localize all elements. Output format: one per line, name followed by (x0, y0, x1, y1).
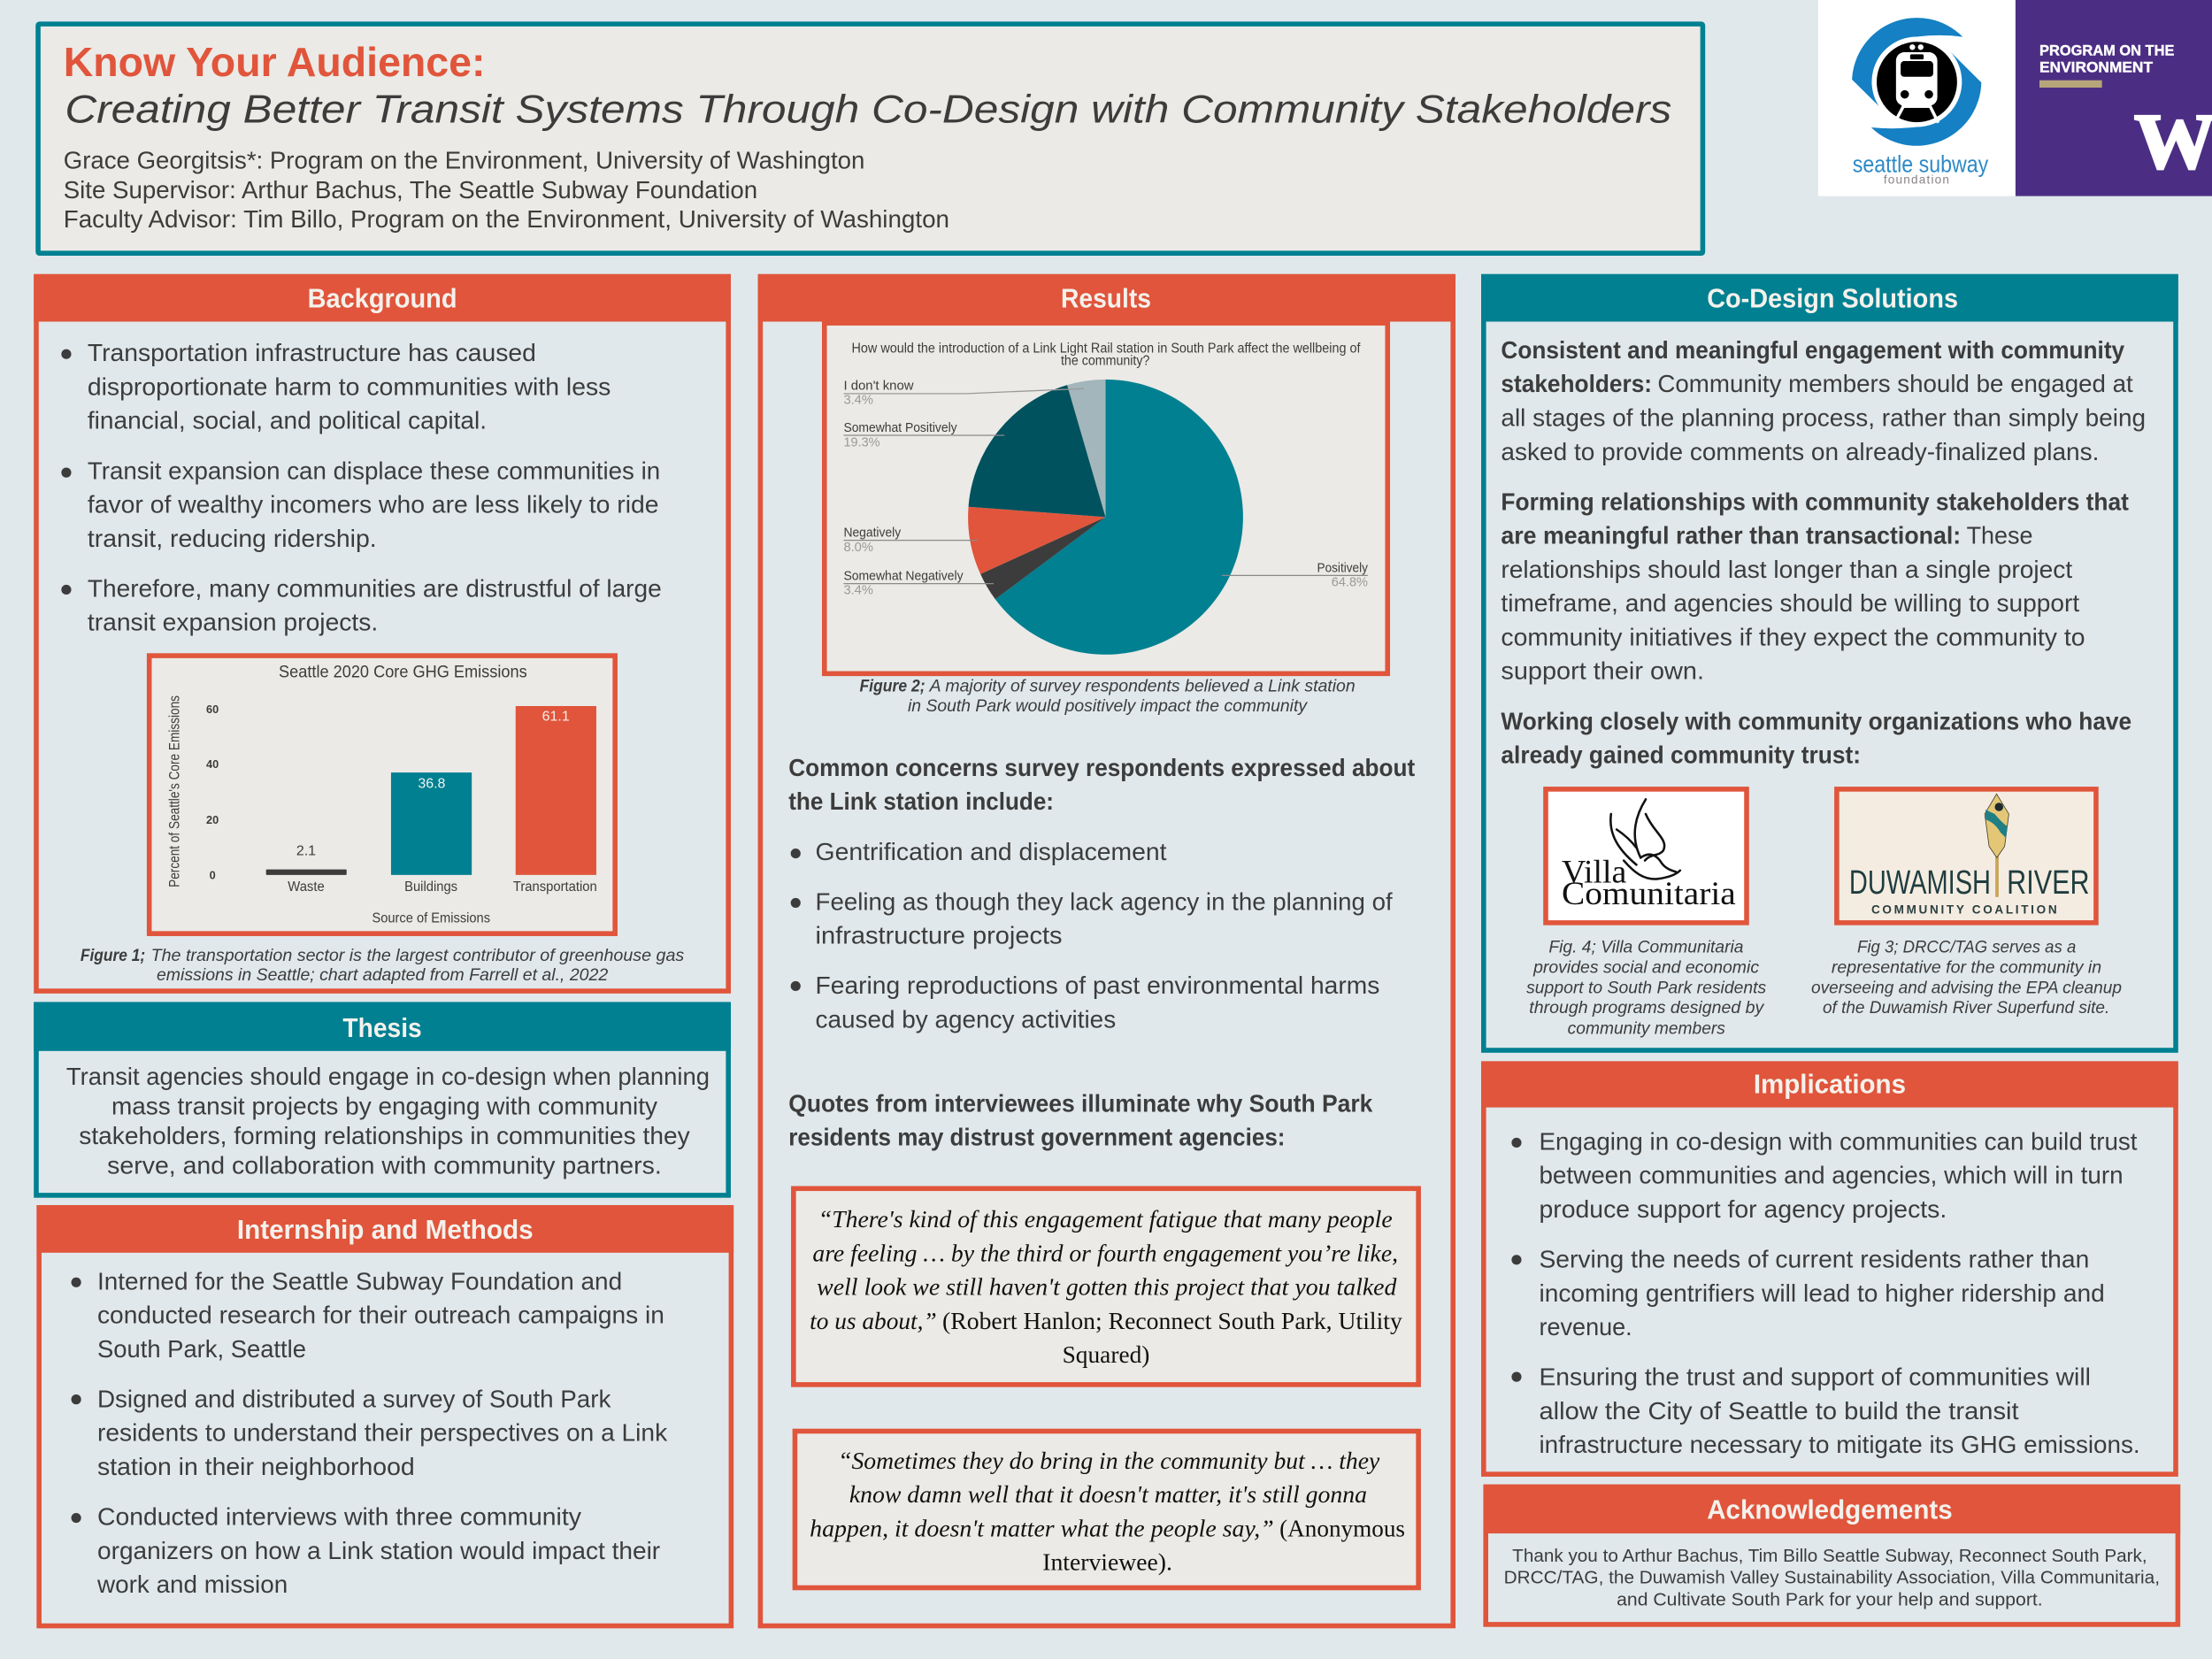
caption: figure 3: overseeing and advising the EPA cleanup (1811, 979, 2122, 997)
panel: Thesis (34, 1002, 731, 1195)
chart: Seattle 2020 core GHG emissions: 36.8 (418, 777, 446, 792)
chart: South Park survey pie: 3.4% (843, 393, 873, 408)
chart: South Park survey pie: Negatively (843, 526, 902, 541)
text: forming relationships: These (1967, 522, 2033, 549)
text: common concerns: infrastructure projects (816, 922, 1063, 949)
text: background bullets: transit expansion projects. (88, 609, 378, 636)
chart: South Park survey pie: 64.8% (1332, 575, 1368, 590)
text: implications bullets: produce support for agency projects. (1539, 1195, 1947, 1223)
text: methods bullets: residents to understand their perspectives on a Link (97, 1419, 667, 1447)
text: common concerns: Gentrification and displacement (816, 838, 1167, 865)
logo: UW Program on the Environment: W (2134, 97, 2212, 185)
chart: Seattle 2020 core GHG emissions: 60 (206, 703, 219, 716)
caption: figure 2: in South Park would positively impact the community (908, 697, 1308, 716)
callout: quote 1: are feeling … by the third or fourth engagement you’re like, (812, 1240, 1398, 1267)
text: community organizations: Working closely with community organizations who have (1501, 707, 2131, 734)
text: methods bullets: organizers on how a Link station would impact their (97, 1537, 660, 1564)
text: implications bullets: incoming gentrifiers will lead to higher ridership and (1539, 1279, 2105, 1307)
chart: South Park survey pie (825, 323, 1387, 673)
text: thanks (1504, 1547, 2160, 1609)
callout: quote 1: to us about,” (810, 1308, 937, 1335)
heading: Results: Results (1061, 285, 1151, 314)
text: quotes intro (788, 1089, 1373, 1151)
text: thesis statement: mass transit projects by engaging with community (111, 1093, 657, 1120)
chart: Seattle 2020 core GHG emissions: Percent of Seattle's Core Emissions (165, 695, 182, 887)
text: consistent engagement (1501, 336, 2146, 465)
subtitle: Creating Better Transit Systems Through Co-Design with Community Stakeholders (65, 88, 1671, 132)
logo: Seattle Subway Foundation: seattle subway (1853, 150, 1989, 177)
text: methods bullets: Interned for the Seattle Subway Foundation and (97, 1267, 622, 1294)
text: consistent engagement: Community members should be engaged at (1657, 370, 2133, 397)
chart: South Park survey pie: 3.4% (843, 583, 873, 598)
authors (64, 147, 949, 233)
heading: Thesis: Thesis (342, 1014, 422, 1043)
text: implications bullets: allow the City of Seattle to build the transit (1539, 1397, 2019, 1425)
callout: quote 2 (795, 1432, 1418, 1587)
chart: South Park survey pie: Somewhat Negatively (843, 569, 964, 584)
chart: South Park survey pie: the community? (1061, 354, 1150, 369)
heading: Background: Background (308, 285, 457, 314)
text: thanks: DRCC/TAG, the Duwamish Valley Sustainability Association, Villa Communitaria, (1504, 1569, 2160, 1588)
text: background bullets: Transportation infrastructure has caused (88, 339, 536, 366)
panel: title block (38, 24, 1702, 253)
text: common concerns: caused by agency activities (816, 1006, 1116, 1033)
text: forming relationships: community initiatives if they expect the community to (1501, 623, 2085, 650)
chart: Seattle 2020 core GHG emissions: Source of Emissions (372, 911, 490, 926)
text: consistent engagement: all stages of the planning process, rather than simply being (1501, 404, 2146, 432)
heading: Implications: Implications (1754, 1071, 1906, 1100)
chart: Seattle 2020 core GHG emissions: Buildings (404, 879, 457, 895)
chart: South Park survey pie: Positively (1317, 561, 1368, 576)
text: forming relationships: relationships should last longer than a single project (1501, 556, 2072, 583)
text: methods bullets: Conducted interviews with three community (97, 1503, 581, 1531)
chart: South Park survey pie: 19.3% (843, 434, 880, 449)
panel: Co-Design Solutions (1481, 274, 2178, 1050)
text: forming relationships: are meaningful rather than transactional: (1501, 522, 1961, 549)
logo: Villa Comunitaria: Comunitaria (1562, 875, 1736, 911)
callout: quote 1: well look we still haven't gotten this project that you talked (817, 1274, 1397, 1302)
caption: figure 4: support to South Park residents (1526, 979, 1767, 997)
caption: figure 2: A majority of survey respondents believed a Link station (929, 677, 1356, 695)
caption: figure 4: Fig. 4; Villa Communitaria (1548, 939, 1744, 957)
caption: figure 4: through programs designed by (1529, 999, 1765, 1018)
chart: Seattle 2020 core GHG emissions: 2.1 (296, 844, 316, 859)
text: methods bullets: work and mission (96, 1571, 288, 1598)
text: quotes intro: residents may distrust government agencies: (788, 1124, 1285, 1151)
text: implications bullets (1511, 1127, 2140, 1458)
heading: Acknowledgements: Acknowledgements (1707, 1495, 1953, 1525)
text: implications bullets: revenue. (1539, 1313, 1632, 1340)
text: thesis statement: stakeholders, forming relationships in communities they (79, 1122, 690, 1149)
text: implications bullets: Engaging in co-design with communities can build trust (1539, 1127, 2138, 1155)
authors: Grace Georgitsis*: Program on the Environment, University of Washington (64, 147, 864, 174)
title: Know Your Audience: (64, 39, 485, 85)
text: thesis statement: Transit agencies should engage in co-design when planning (66, 1063, 710, 1090)
panel: Internship and Methods (36, 1205, 733, 1626)
text: background bullets: favor of wealthy incomers who are less likely to ride (88, 491, 659, 518)
chart: Seattle 2020 core GHG emissions: Transportation (513, 879, 597, 895)
text: common concerns: Common concerns survey respondents expressed about (788, 754, 1415, 781)
text: implications bullets: infrastructure necessary to mitigate its GHG emissions. (1539, 1431, 2140, 1458)
panel: Acknowledgements (1483, 1485, 2180, 1624)
caption: figure 3: representative for the community in (1832, 958, 2101, 977)
caption: figure 4: community members (1568, 1019, 1725, 1038)
logo: Villa Comunitaria: Villa (1562, 853, 1626, 889)
panel: Implications (1481, 1061, 2178, 1474)
caption: figure 3 (1811, 939, 2122, 1018)
chart: Seattle 2020 core GHG emissions: Seattle 2020 Core GHG Emissions (279, 663, 527, 681)
text: thesis statement (66, 1063, 710, 1179)
text: forming relationships: Forming relationships with community stakeholders that (1501, 488, 2129, 515)
text: background bullets (61, 339, 662, 636)
callout: quote 1 (794, 1188, 1418, 1385)
text: consistent engagement: Consistent and meaningful engagement with community (1501, 336, 2125, 364)
callout: quote 2: Interviewee). (1042, 1549, 1172, 1577)
text: thanks: and Cultivate South Park for your help and support. (1617, 1590, 2043, 1609)
text: background bullets: Transit expansion can displace these communities in (88, 457, 660, 484)
heading: Co-Design Solutions: Co-Design Solutions (1707, 285, 1958, 314)
text: thesis statement: serve, and collaboration with community partners. (107, 1152, 662, 1179)
text: common concerns: the Link station include: (788, 787, 1054, 815)
logo: Duwamish River Community Coalition: RIVER (2007, 864, 2090, 902)
text: methods bullets: conducted research for their outreach campaigns in (97, 1302, 664, 1329)
callout: quote 2: (Anonymous (1279, 1515, 1405, 1542)
callout: quote 2: know damn well that it doesn't matter, it's still gonna (849, 1481, 1367, 1509)
text: background bullets: financial, social, and political capital. (88, 407, 487, 434)
text: quotes intro: Quotes from interviewees illuminate why South Park (788, 1089, 1373, 1117)
text: consistent engagement: stakeholders: (1501, 370, 1652, 397)
text: forming relationships (1501, 488, 2129, 685)
logo: Duwamish River Community Coalition: COMMUNITY COALITION (1871, 903, 2057, 917)
logo: UW Program on the Environment: PROGRAM ON THE (2039, 42, 2174, 59)
logo: UW Program on the Environment: ENVIRONMENT (2039, 58, 2154, 75)
caption: figure 1: Figure 1; (81, 947, 145, 965)
caption: figure 3: of the Duwamish River Superfund site. (1823, 999, 2109, 1018)
logo: Seattle Subway Foundation: foundation (1884, 173, 1949, 186)
chart: Seattle 2020 core GHG emissions (150, 656, 615, 933)
chart: South Park survey pie: How would the introduction of a Link Light Rail station in South Park affect the wellbeing of (852, 341, 1361, 356)
logo: Villa Comunitaria (1546, 789, 1747, 923)
chart: Seattle 2020 core GHG emissions: 61.1 (542, 710, 570, 725)
text: background bullets: transit, reducing ridership. (88, 525, 377, 552)
panel: Background (34, 274, 731, 991)
caption: figure 2 (859, 677, 1356, 716)
text: methods bullets: South Park, Seattle (97, 1335, 306, 1363)
logo: Seattle Subway Foundation (1818, 0, 2016, 196)
caption: figure 2: Figure 2; (859, 677, 926, 695)
callout: quote 2: happen, it doesn't matter what the people say,” (810, 1515, 1274, 1542)
callout: quote 1: Squared) (1063, 1341, 1149, 1369)
text: background bullets: disproportionate harm to communities with less (88, 373, 611, 400)
text: implications bullets: Ensuring the trust and support of communities will (1539, 1363, 2091, 1391)
logo: Duwamish River Community Coalition: DUWAMISH (1849, 864, 1991, 902)
panel: Results (758, 274, 1455, 1626)
callout: quote 1: “There's kind of this engagement fatigue that many people (818, 1206, 1393, 1233)
chart: South Park survey pie: I don't know (843, 379, 914, 394)
logo: Duwamish River Community Coalition (1837, 789, 2096, 923)
caption: figure 1: emissions in Seattle; chart adapted from Farrell et al., 2022 (157, 966, 609, 985)
chart: Seattle 2020 core GHG emissions: 0 (210, 868, 216, 881)
callout: quote 1: (Robert Hanlon; Reconnect South Park, Utility (942, 1308, 1402, 1335)
caption: figure 4 (1526, 939, 1767, 1038)
chart: Seattle 2020 core GHG emissions: Waste (288, 879, 325, 895)
text: thanks: Thank you to Arthur Bachus, Tim Billo Seattle Subway, Reconnect South Park, (1512, 1547, 2147, 1566)
text: implications bullets: between communities and agencies, which will in turn (1539, 1162, 2124, 1189)
text: methods bullets: station in their neighborhood (97, 1453, 415, 1480)
text: methods bullets (72, 1267, 667, 1598)
chart: Seattle 2020 core GHG emissions: 20 (206, 813, 219, 826)
chart: Seattle 2020 core GHG emissions: 40 (206, 757, 219, 771)
authors: Site Supervisor: Arthur Bachus, The Seattle Subway Foundation (64, 176, 757, 204)
caption: figure 1: The transportation sector is the largest contributor of greenhouse gas (151, 947, 685, 965)
caption: figure 4: provides social and economic (1532, 958, 1759, 977)
text: implications bullets: Serving the needs of current residents rather than (1539, 1246, 2089, 1273)
chart: South Park survey pie: Somewhat Positively (843, 420, 957, 435)
text: common concerns: Fearing reproductions of past environmental harms (816, 972, 1379, 999)
caption: figure 1 (81, 947, 685, 985)
text: forming relationships: timeframe, and agencies should be willing to support (1501, 589, 2079, 617)
text: community organizations: already gained community trust: (1501, 741, 1861, 769)
logo: UW Program on the Environment (2016, 0, 2212, 196)
text: background bullets: Therefore, many communities are distrustful of large (88, 574, 662, 602)
chart: South Park survey pie: 8.0% (843, 540, 873, 555)
text: community organizations (1501, 707, 2131, 769)
text: consistent engagement: asked to provide comments on already-finalized plans. (1501, 438, 2099, 465)
text: methods bullets: Dsigned and distributed a survey of South Park (97, 1385, 611, 1412)
callout: quote 2: “Sometimes they do bring in the community but … they (838, 1448, 1380, 1475)
text: forming relationships: support their own. (1501, 657, 1704, 685)
caption: figure 3: Fig 3; DRCC/TAG serves as a (1857, 939, 2076, 957)
text: common concerns: Feeling as though they lack agency in the planning of (816, 887, 1393, 915)
text: common concerns (788, 754, 1415, 1033)
authors: Faculty Advisor: Tim Billo, Program on the Environment, University of Washington (64, 205, 949, 233)
heading: Internship and Methods: Internship and Methods (237, 1216, 534, 1245)
